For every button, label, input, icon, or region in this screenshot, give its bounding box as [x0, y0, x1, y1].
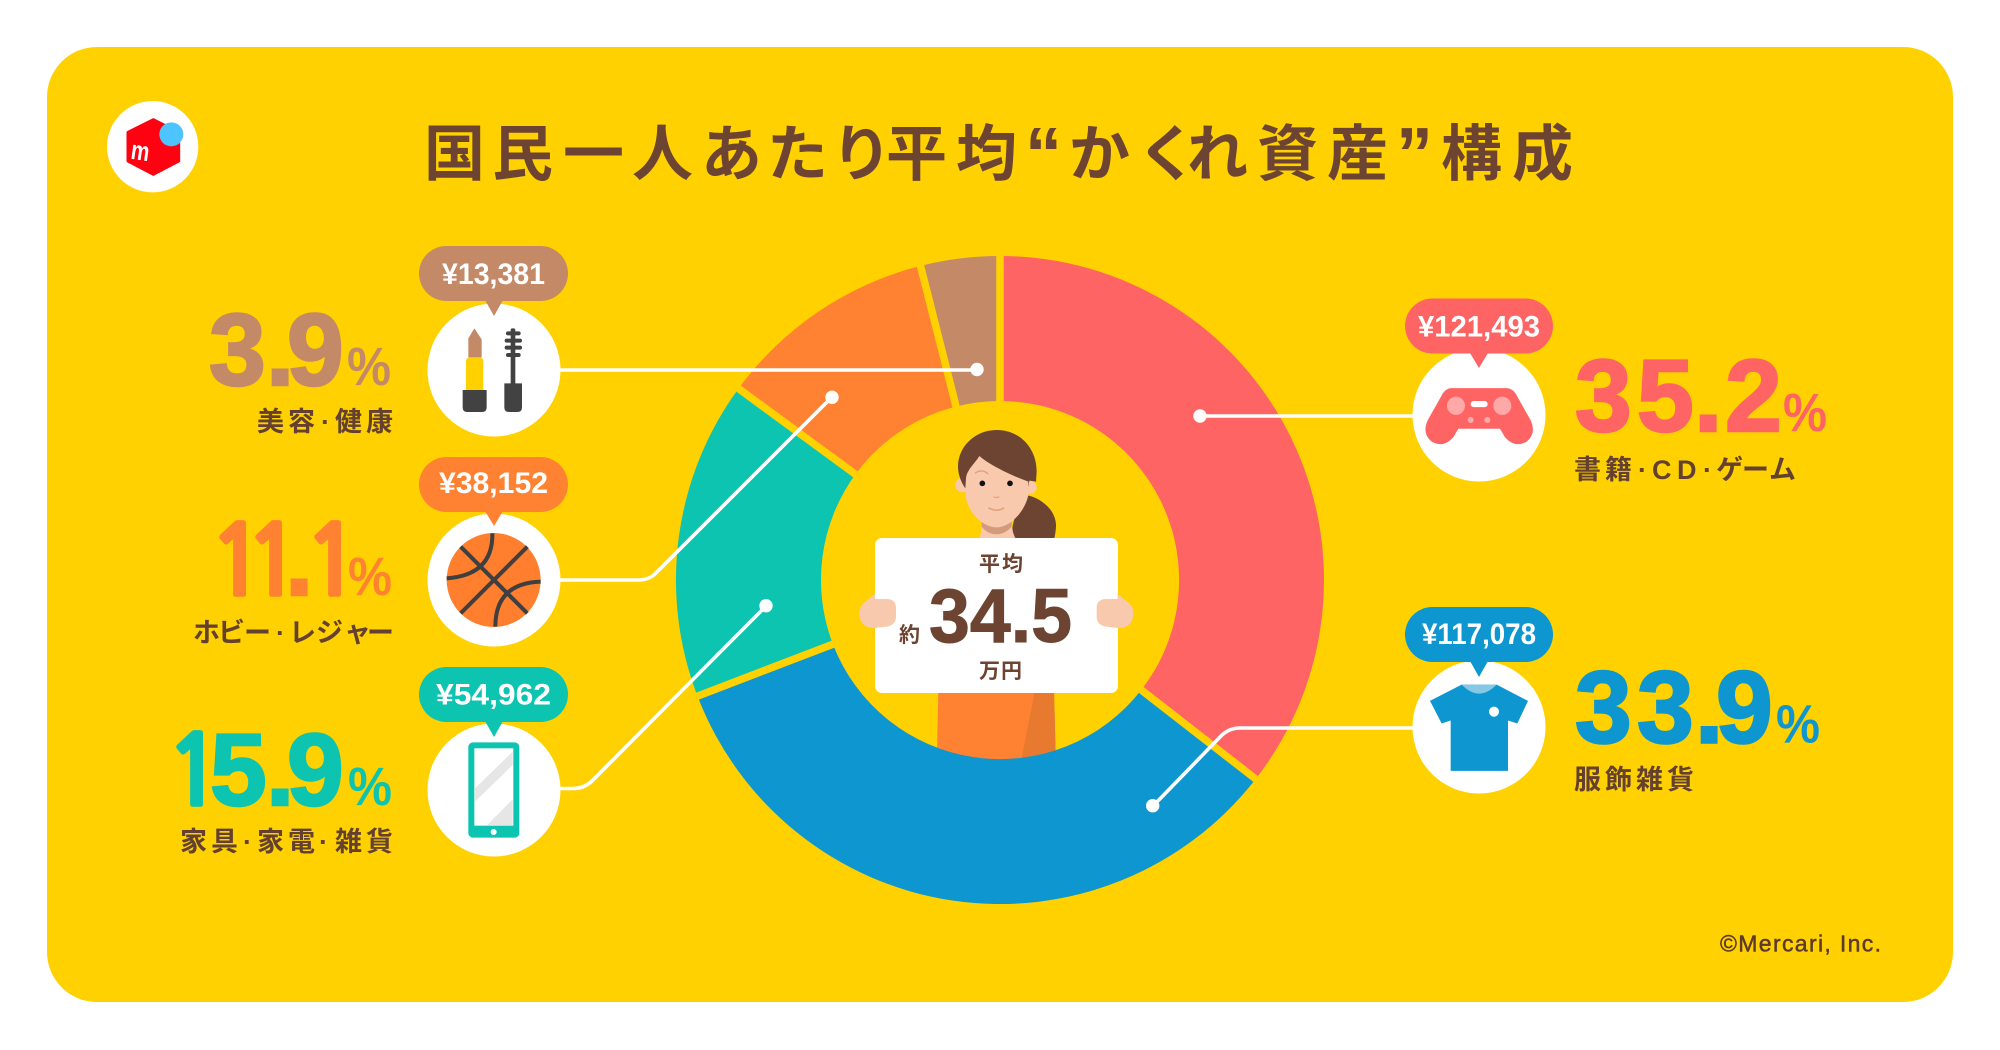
center sign [875, 538, 1118, 693]
bubble: 13,381 yen [419, 246, 568, 316]
segment: clothing 33.9% [698, 644, 1256, 904]
percent: 35.2: 35.2 [1575, 339, 1782, 453]
label: books/CD/games: 書籍·CD·ゲーム [1574, 455, 1796, 485]
bubble: 54,962 yen: ¥54,962 [436, 678, 551, 712]
percent: 15.9: % [348, 757, 392, 817]
woman body [937, 690, 1056, 767]
bubble: 38,152 yen: ¥38,152 [439, 467, 548, 500]
copyright: ©Mercari, Inc. [1720, 930, 1881, 956]
percent: 15.9: 5.9 [210, 713, 344, 827]
hands [859, 594, 1133, 628]
item: beauty/health [209, 246, 568, 437]
title: “ [1025, 112, 1062, 195]
percent: 11.1 [208, 503, 392, 617]
leader lines [555, 363, 1420, 812]
sign value: 34.5 [929, 574, 1072, 659]
icon: basketball [428, 514, 560, 646]
bubble: 117,078 yen: ¥117,078 [1422, 618, 1536, 651]
label: hobby/leisure: ホビー·レジャー [193, 618, 394, 648]
label: furniture/appliances: 家具·家電·雑貨 [180, 827, 393, 857]
woman figure holding sign [937, 430, 1056, 767]
title: かくれ資産 [1069, 120, 1388, 188]
segment: furniture/appliances 15.9% [676, 389, 856, 696]
segment: books/CD/games 35.2% [1000, 256, 1324, 779]
sign text: approx: 約 [899, 624, 920, 647]
logo: Mercari [107, 101, 198, 192]
segment: hobby/leisure 11.1% [738, 266, 956, 474]
logo: Mercari: m [129, 135, 151, 168]
sign text: average: 平均 [979, 553, 1023, 576]
item: furniture/appliances [165, 667, 568, 857]
woman head [955, 430, 1056, 543]
percent: 11.1: % [348, 547, 392, 607]
percent: 11.1: 1 [303, 514, 362, 610]
icon: lipstick and mascara [428, 304, 560, 436]
percent: 3.9: 3.9 [209, 293, 344, 407]
bubble: 13,381 yen: ¥13,381 [442, 258, 545, 291]
icon: t-shirt [1412, 660, 1546, 794]
percent: 15.9: 1 [165, 724, 224, 820]
percent: 3.9: % [347, 337, 391, 397]
percent: 15.9 [165, 713, 392, 827]
percent: 35.2: % [1783, 383, 1827, 443]
bubble: 38,152 yen [419, 457, 568, 526]
item: hobby/leisure [193, 457, 568, 648]
title: ” [1396, 112, 1433, 195]
sign text: unit: 万円 [979, 660, 1022, 683]
bubble: 121,493 yen: ¥121,493 [1418, 310, 1540, 344]
icon: smartphone [428, 724, 560, 856]
percent: 11.1: . [285, 503, 313, 617]
percent: 33.9: % [1776, 694, 1820, 754]
item: clothing [1405, 607, 1820, 795]
bubble: 121,493 yen [1405, 298, 1553, 368]
donut chart [676, 256, 1324, 904]
segment: beauty/health 3.9% [920, 256, 1000, 406]
bubble: 54,962 yen [419, 667, 568, 737]
percent: 11.1: 11 [208, 514, 303, 610]
title: 国民一人あたり平均 [424, 120, 1017, 188]
percent: 33.9: 33.9 [1575, 650, 1773, 764]
item: books/CD/games [1405, 298, 1827, 485]
icon: game controller [1412, 348, 1546, 482]
title: 構成 [1441, 120, 1573, 188]
label: beauty/health: 美容·健康 [257, 407, 393, 437]
label: clothing: 服飾雑貨 [1574, 765, 1694, 795]
bubble: 117,078 yen [1405, 607, 1553, 677]
